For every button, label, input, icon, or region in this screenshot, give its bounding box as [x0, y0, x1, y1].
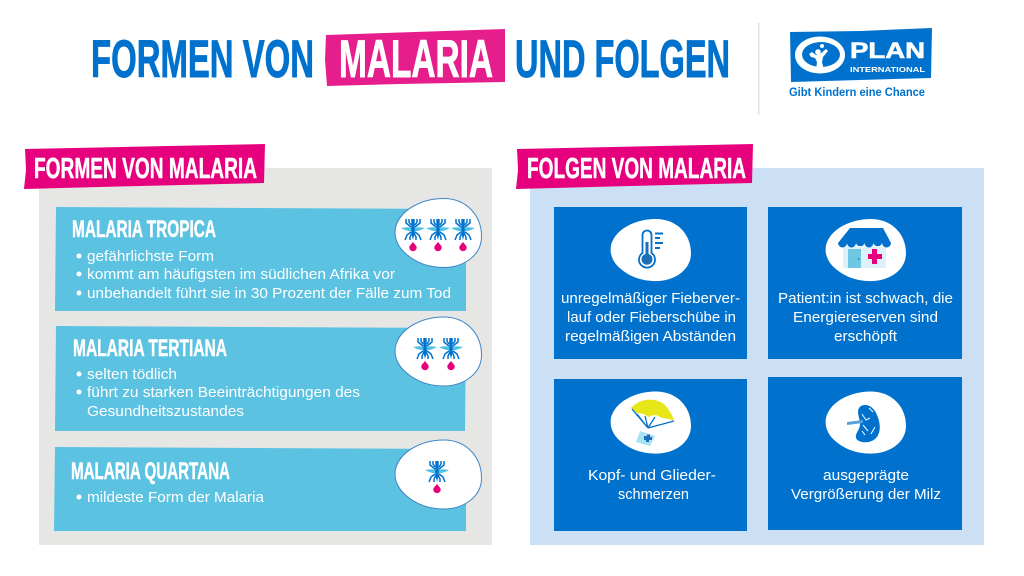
card: Fieber: regelmäßigen Abständen: [565, 328, 736, 345]
card: Milz: [768, 377, 962, 530]
card: Malaria tropica: kommt am häufigsten im südlichen Afrika vor: [87, 266, 395, 283]
logo: Plan International: [789, 28, 932, 99]
card: Milz: Vergrößerung der Milz: [791, 486, 941, 503]
icon: two mosquitoes: [395, 317, 482, 386]
card: Schmerzen: [554, 379, 747, 531]
card: Schwäche: erschöpft: [834, 328, 898, 345]
card: Malaria tertiana: MALARIA TERTIANA: [73, 335, 227, 362]
card: Malaria tertiana: Gesundheitszustandes: [87, 403, 244, 420]
card: Schwäche: Energiereserven sind: [793, 309, 938, 326]
heading: Formen von Malaria: [24, 144, 265, 189]
card: Fieber: [554, 207, 747, 359]
icon: parachute: [611, 392, 691, 454]
card: Malaria quartana: MALARIA QUARTANA: [71, 458, 230, 485]
card: Malaria tertiana: selten tödlich: [87, 366, 177, 383]
card: Malaria tropica: [55, 198, 482, 311]
title: FORMEN VON: [91, 30, 314, 89]
title highlight: Malaria: [325, 29, 505, 89]
logo: Plan International: Gibt Kindern eine Chance: [789, 87, 925, 99]
heading: Folgen von Malaria: [516, 144, 753, 189]
card: Malaria tropica: gefährlichste Form: [87, 248, 214, 265]
card: Schmerzen: schmerzen: [618, 486, 689, 503]
icon: three mosquitoes: [395, 198, 482, 268]
icon: clinic: [826, 219, 906, 281]
card: Fieber: lauf oder Fieberschübe in: [567, 309, 736, 326]
card: Malaria tertiana: führt zu starken Beeinträchtigungen des: [87, 384, 360, 401]
icon: thermometer: [611, 219, 691, 281]
logo: Plan International: INTERNATIONAL: [850, 65, 925, 74]
title: UND FOLGEN: [515, 30, 730, 89]
logo: Plan International: PLAN: [850, 38, 925, 63]
card: Malaria tropica: unbehandelt führt sie in 30 Prozent der Fälle zum Tod: [87, 285, 451, 302]
card: Schwäche: Patient:in ist schwach, die: [778, 290, 953, 307]
panel: Folgen von Malaria: [516, 144, 984, 545]
icon: spleen: [826, 392, 906, 454]
heading: Formen von Malaria: FORMEN VON MALARIA: [34, 153, 257, 185]
card: Malaria tertiana: [55, 317, 482, 431]
card: Malaria tropica: MALARIA TROPICA: [72, 216, 216, 243]
card: Milz: ausgeprägte: [823, 467, 909, 484]
title: [91, 29, 730, 89]
card: Schmerzen: Kopf- und Glieder-: [588, 467, 716, 484]
panel: Formen von Malaria: [24, 144, 492, 545]
heading: Folgen von Malaria: FOLGEN VON MALARIA: [527, 153, 746, 185]
card: Malaria quartana: [54, 440, 482, 531]
card: Fieber: unregelmäßiger Fieberver-: [561, 290, 740, 307]
icon: one mosquito: [395, 440, 482, 509]
title highlight: Malaria: MALARIA: [339, 30, 493, 89]
card: Malaria quartana: mildeste Form der Malaria: [87, 489, 265, 506]
card: Schwäche: [768, 207, 962, 359]
